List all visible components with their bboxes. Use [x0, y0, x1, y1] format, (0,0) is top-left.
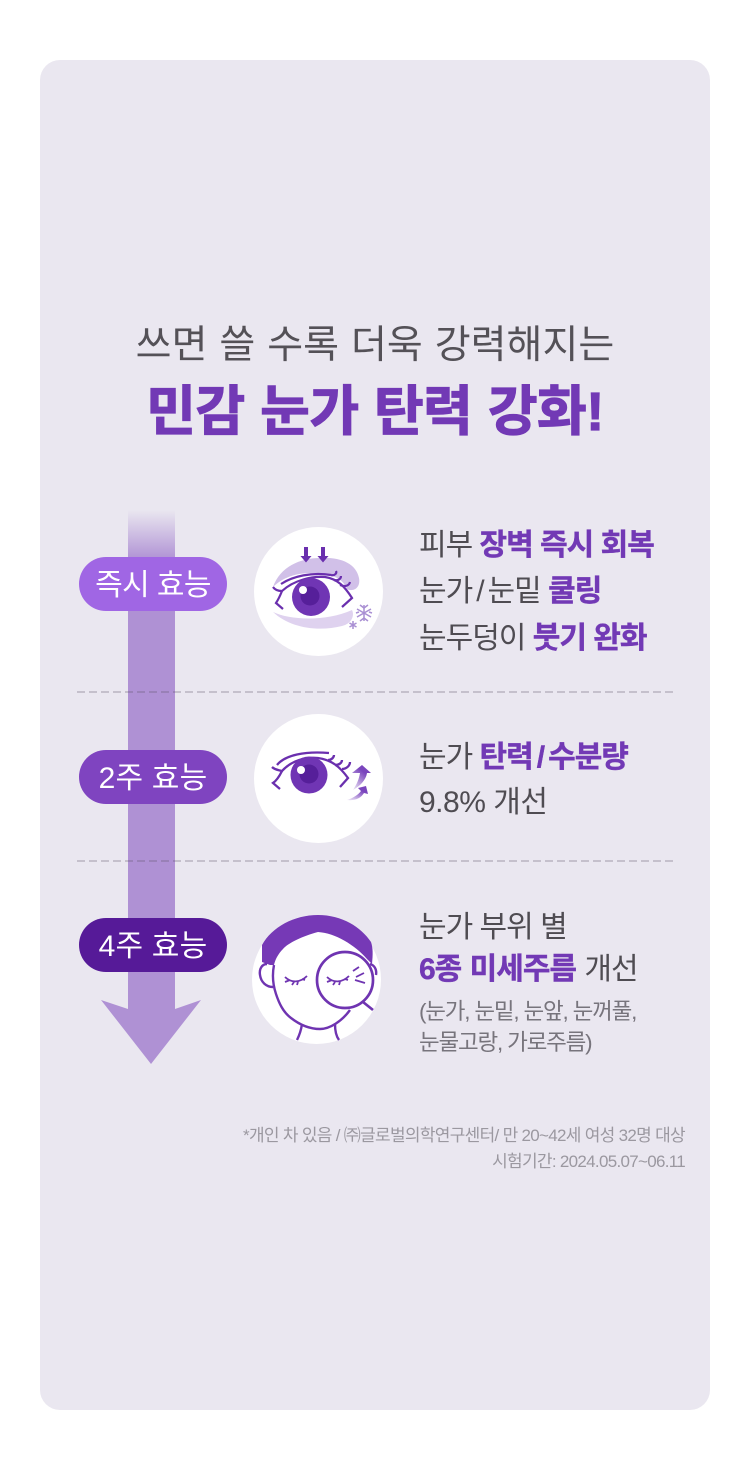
title — [136, 324, 614, 442]
pill: 2 weeks effect: 2주 효능 — [99, 762, 207, 795]
divider — [77, 691, 673, 693]
text: 2 weeks effect — [419, 741, 628, 819]
footnote — [243, 1126, 685, 1171]
pill: 4 weeks effect — [79, 918, 227, 972]
text: 4 weeks effect — [419, 911, 638, 1055]
line: 눈가/눈밑 쿨링 — [419, 575, 601, 608]
line: 눈두덩이 붓기 완화 — [419, 622, 646, 655]
footnote: 시험기간: 2024.05.07~06.11 — [492, 1152, 685, 1171]
icon: face with magnifier — [252, 915, 381, 1044]
pill: 4 weeks effect: 4주 효능 — [99, 930, 207, 963]
heading line 1: 쓰면 쓸 수록 더욱 강력해지는 — [136, 324, 614, 367]
footnote: *개인 차 있음 / ㈜글로벌의학연구센터/ 만 20~42세 여성 32명 대상 — [243, 1126, 685, 1145]
icon: eye with lift arrows — [254, 714, 383, 843]
pill: immediate effect: 즉시 효능 — [95, 569, 211, 602]
pill: immediate effect — [79, 557, 227, 611]
detail: 눈물고랑, 가로주름) — [419, 1030, 591, 1055]
heading line 2: 민감 눈가 탄력 강화! — [146, 382, 604, 442]
line: 9.8% 개선 — [419, 786, 547, 819]
detail — [419, 999, 636, 1055]
line: 피부 장벽 즉시 회복 — [419, 529, 654, 562]
line: 눈가 부위 별 — [419, 911, 567, 944]
icon: eye with cooling — [254, 527, 383, 656]
timeline arrow — [101, 515, 201, 1064]
detail: (눈가, 눈밑, 눈앞, 눈꺼풀, — [419, 999, 636, 1024]
text: immediate effect — [419, 529, 654, 655]
line: 눈가 탄력/수분량 — [419, 741, 628, 774]
line: 6종 미세주름 개선 — [419, 953, 638, 986]
pill: 2 weeks effect — [79, 750, 227, 804]
